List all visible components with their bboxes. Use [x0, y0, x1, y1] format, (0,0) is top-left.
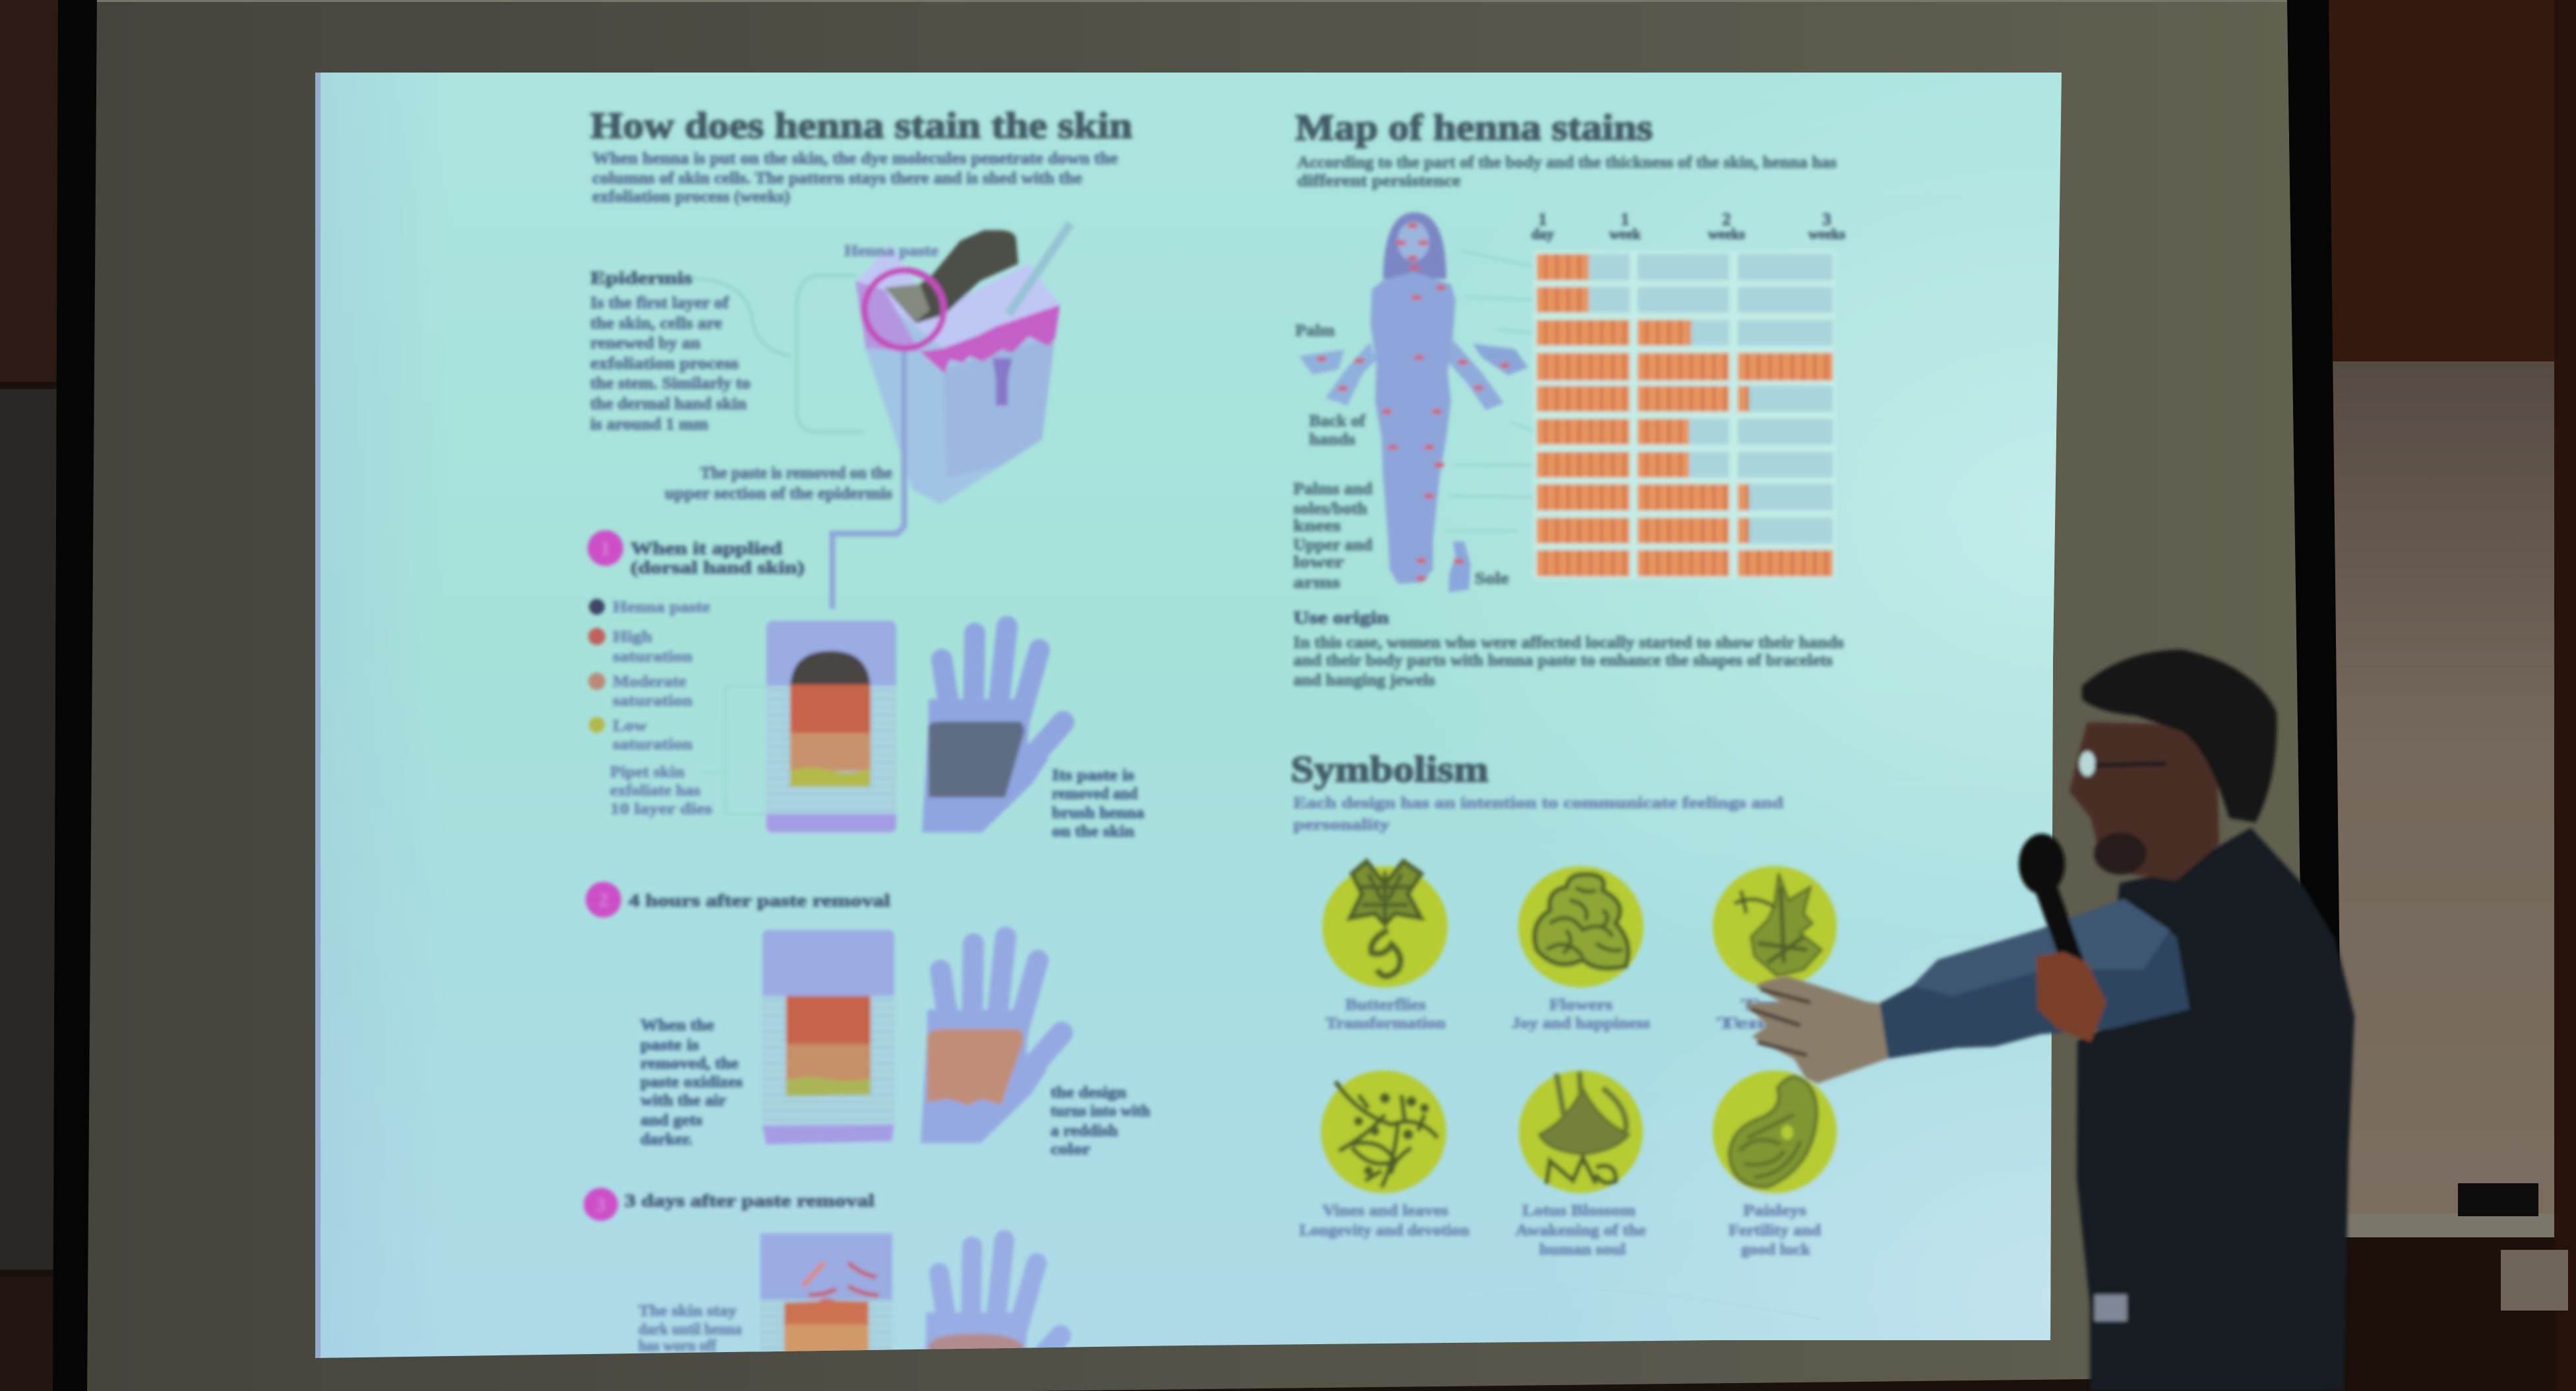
caption: flowers: Joy and happiness: [1512, 1015, 1650, 1032]
text block: use origin: [1293, 608, 1844, 689]
microphone: [2019, 834, 2073, 965]
left arm and hand: [1326, 342, 1376, 406]
icon: step number 1: 1: [601, 539, 610, 559]
intro text: columns of skin cells. The pattern stays there and is shed with the: [592, 170, 1082, 187]
intro text: personality: [1293, 817, 1390, 834]
symbol: paisleys: [1713, 1070, 1837, 1193]
note: reddish color: color: [1051, 1141, 1090, 1158]
symbol: vines and leaves: [1321, 1070, 1446, 1193]
body part labels: Upper and: [1293, 536, 1372, 554]
figure: woman with stain points: [1299, 212, 1537, 592]
label: henna paste: Henna paste: [844, 243, 938, 260]
text: skin stays dark: has worn off: [638, 1338, 717, 1355]
body silhouette: [1370, 272, 1456, 584]
text block: epidermis: is around 1 mm: [590, 416, 708, 433]
body part labels: Sole: [1475, 570, 1509, 588]
step heading: When it applied: [630, 539, 783, 558]
intro text: [592, 150, 1118, 206]
caption: lotus blossom: human soul: [1539, 1241, 1626, 1258]
body part labels: hands: [1309, 431, 1355, 448]
caption: paisleys: Paisleys: [1743, 1202, 1806, 1220]
hair: [1383, 212, 1446, 279]
caption: lotus blossom: Lotus Blossom: [1522, 1202, 1636, 1220]
text: when the paste is removed: paste is: [640, 1037, 699, 1054]
text: when the paste is removed: When the: [640, 1017, 714, 1034]
heading: map of henna stains: Map of henna stains: [1295, 108, 1653, 148]
cross section 2: [762, 930, 894, 1144]
time axis labels: 2: [1723, 210, 1731, 229]
step heading: 3 days after paste removal: [625, 1191, 874, 1210]
icon: step number 2: 2: [599, 890, 608, 911]
intro text: different persistence: [1297, 172, 1461, 190]
text: skin stays dark: dark until henna: [638, 1321, 742, 1338]
caption: flowers: Flowers: [1549, 997, 1612, 1014]
text: when the paste is removed: with the air: [640, 1092, 726, 1109]
time axis labels: 1: [1621, 210, 1629, 229]
caption: vines and leaves: Vines and leaves: [1322, 1202, 1448, 1220]
time axis labels: week: [1609, 226, 1641, 242]
step 2: 4 hours after paste removal: [586, 882, 1150, 1158]
symbol: lotus blossom: [1519, 1070, 1643, 1193]
body part labels: [1293, 322, 1509, 592]
legend: saturation levels: Low: [613, 718, 648, 735]
icon: hand with fading stain: [919, 1240, 1060, 1391]
intro text: When henna is put on the skin, the dye molecules penetrate down the: [592, 150, 1118, 168]
note: paste on hand: Its paste is: [1052, 767, 1134, 784]
symbol: flowers: [1518, 866, 1643, 987]
text: skin stays dark: The skin stay: [638, 1303, 737, 1320]
icon: step number 3: [584, 1188, 618, 1221]
glasses: [2079, 751, 2166, 776]
caption: trees: Trees: [1741, 997, 1800, 1014]
text: when the paste is removed: and gets: [640, 1112, 702, 1129]
caption: butterflies: [1326, 997, 1446, 1032]
legend: saturation levels: Henna paste: [613, 599, 710, 616]
text block: use origin: In this case, women who were affected locally started to show their hands: [1293, 634, 1844, 652]
intro text: Each design has an intention to communicate feelings and: [1293, 795, 1784, 812]
open palms: [1299, 350, 1344, 375]
note: paste on hand: [1052, 767, 1144, 840]
body part labels: knees: [1293, 517, 1341, 535]
symbol: butterflies: [1322, 861, 1448, 987]
caption: trees: Tenacity: [1717, 1015, 1829, 1032]
beard: [2094, 832, 2147, 875]
text block: epidermis: Is the first layer of: [590, 294, 729, 312]
step 1: when it applied: [588, 530, 1144, 840]
text: pipet skin note: 10 layer dies: [610, 801, 712, 818]
pointing arm sleeve: [1880, 899, 2190, 1059]
caption: lotus blossom: Awakening of the: [1516, 1222, 1646, 1239]
time axis labels: 3: [1823, 210, 1831, 229]
empty cells: [1537, 254, 1833, 543]
intro text: exfoliation process (weeks): [592, 188, 790, 206]
time axis labels: weeks: [1808, 226, 1846, 242]
body part labels: arms: [1293, 574, 1340, 592]
caption: butterflies: Butterflies: [1345, 997, 1426, 1014]
filled cells: [1537, 254, 1833, 576]
panel: how does henna stain the skin: [584, 106, 1150, 1391]
legend: saturation levels: saturation: [613, 648, 692, 665]
caption: butterflies: Transformation: [1326, 1015, 1446, 1032]
text: when the paste is removed: paste oxidizes: [640, 1074, 743, 1091]
note: paste on hand: on the skin: [1052, 823, 1134, 840]
step heading: 4 hours after paste removal: [629, 891, 890, 910]
text block: epidermis: the stem. Similarly to: [590, 375, 751, 392]
icon: step number 3: 3: [596, 1195, 605, 1216]
caption: paisleys: good luck: [1741, 1241, 1811, 1258]
note: reddish color: a reddish: [1051, 1123, 1118, 1140]
projected slide: [310, 66, 2064, 1391]
legend: saturation levels: [588, 599, 710, 753]
heading: how does henna stain the skin: How does henna stain the skin: [590, 106, 1132, 146]
text: when the paste is removed: darker.: [640, 1131, 692, 1148]
caption: vines and leaves: [1299, 1202, 1469, 1239]
intro text: According to the part of the body and the thickness of the skin, henna has: [1297, 154, 1837, 171]
text block: epidermis: [590, 268, 751, 433]
heading: symbolism: Symbolism: [1291, 749, 1488, 790]
body part labels: lower: [1293, 553, 1344, 571]
foot sole: [1449, 541, 1471, 592]
text: pipet skin note: [610, 686, 766, 818]
text: skin stays dark: [638, 1303, 742, 1355]
text block: epidermis: renewed by an: [590, 334, 700, 352]
body part labels: Palms and: [1293, 480, 1372, 498]
caption: flowers: [1512, 997, 1650, 1032]
icon: skin block with henna paste: [692, 224, 1070, 609]
step heading: (dorsal hand skin): [630, 558, 805, 577]
caption: trees: [1717, 997, 1829, 1032]
face: [1397, 222, 1429, 261]
stain points: [1316, 223, 1510, 581]
time axis labels: [1531, 210, 1846, 242]
time axis labels: weeks: [1708, 226, 1746, 242]
caption: paisleys: [1729, 1202, 1822, 1258]
icon: hand with henna paste: [922, 627, 1063, 832]
note: reddish color: turns into with: [1051, 1103, 1150, 1120]
text: when the paste is removed: [640, 1017, 743, 1148]
text block: epidermis: Epidermis: [590, 268, 692, 288]
chart: stain persistence grid: [1533, 251, 1835, 579]
icon: step number 1: [588, 530, 623, 566]
text block: epidermis: exfoliation process: [590, 355, 739, 373]
cross section 3: [760, 1233, 892, 1359]
text: pipet skin note: Pipet skin: [610, 764, 685, 781]
legend: saturation levels: Moderate: [613, 673, 687, 691]
caption: paste position: upper section of the epidermis: [665, 485, 892, 503]
icon: step number 2: [586, 882, 621, 917]
text block: epidermis: the skin, cells are: [590, 315, 722, 332]
body part labels: Back of: [1309, 412, 1366, 430]
caption: lotus blossom: [1516, 1202, 1646, 1258]
cross section 1: [766, 621, 896, 832]
caption: vines and leaves: Longevity and devotion: [1299, 1222, 1469, 1239]
time axis labels: day: [1531, 226, 1554, 242]
belt tag: [2095, 1295, 2127, 1321]
body part labels: soles/both: [1293, 500, 1367, 518]
legend: saturation levels: saturation: [613, 736, 692, 753]
panel: map of henna stains: [1293, 108, 1846, 689]
caption: paste position: [665, 464, 892, 503]
note: reddish color: the design: [1051, 1084, 1126, 1101]
pointing hand: [1744, 975, 1888, 1084]
note: paste on hand: removed and: [1052, 786, 1138, 803]
head: [2070, 722, 2219, 881]
body part labels: Palm: [1295, 322, 1335, 340]
right arm and hand: [1449, 340, 1504, 410]
legend: saturation levels: saturation: [613, 693, 692, 710]
intro text: [1297, 154, 1837, 190]
text: pipet skin note: exfoliate has: [610, 782, 700, 799]
caption: paisleys: Fertility and: [1729, 1222, 1822, 1239]
holding hand: [2036, 952, 2106, 1042]
panel: symbolism: [1291, 749, 1837, 1258]
text: when the paste is removed: removed, the: [640, 1055, 739, 1072]
time axis labels: 1: [1538, 210, 1547, 229]
text block: use origin: and hanging jewels: [1293, 671, 1435, 689]
legend: saturation levels: High: [613, 629, 652, 646]
note: paste on hand: brush henna: [1052, 805, 1144, 822]
text block: use origin: Use origin: [1293, 608, 1390, 627]
note: reddish color: [1051, 1084, 1150, 1158]
icon: hand with orange stain: [921, 937, 1062, 1143]
text block: epidermis: the dermal hand skin: [590, 395, 747, 413]
presenter body: [2077, 828, 2354, 1391]
intro text: [1293, 795, 1784, 834]
presenter: [1744, 650, 2354, 1391]
step 3: 3 days after paste removal: [584, 1188, 1060, 1391]
symbol: trees: [1713, 866, 1837, 987]
step heading: [630, 539, 805, 577]
whiteboard on the wall: [2331, 361, 2568, 1311]
caption: paste position: The paste is removed on the: [700, 464, 892, 482]
hair: [2082, 650, 2277, 822]
text block: use origin: and their body parts with henna paste to enhance the shapes of bracelets: [1293, 652, 1833, 669]
